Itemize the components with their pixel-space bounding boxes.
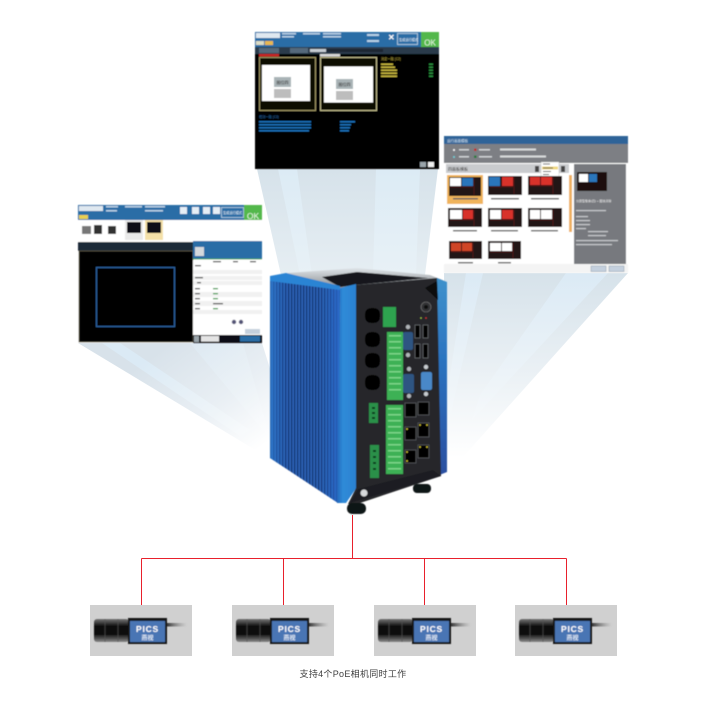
RJ45 ethernet ports — [405, 402, 429, 463]
tool icons — [82, 225, 116, 234]
light beam: top screen to device — [257, 169, 438, 275]
power connector and LEDs — [420, 302, 431, 319]
rubber feet — [347, 484, 431, 514]
footer bar — [193, 335, 262, 343]
front blue edge — [337, 284, 357, 503]
thumb screw — [360, 490, 368, 496]
blue result list: 检测一致 (C3) — [259, 114, 279, 119]
camera 1: 燕视 — [141, 634, 154, 642]
panel: right software screen: 运行画面模板 — [447, 138, 468, 143]
camera 3 — [374, 605, 476, 656]
camera view 2: 图位四 — [338, 81, 350, 87]
status: OK — [244, 205, 262, 221]
thumbnails — [125, 220, 163, 240]
device: industrial vision controller — [270, 268, 447, 514]
camera 3: PICS — [420, 624, 443, 634]
yellow result list — [381, 56, 433, 77]
panel: right software screen — [444, 136, 628, 273]
camera view 1: 图位四 — [276, 79, 288, 85]
top cover — [272, 268, 445, 288]
camera 2: 燕视 — [283, 634, 296, 642]
panel: left software screen — [78, 205, 262, 343]
header bar: 生成运行模式 — [399, 37, 419, 42]
camera 1 — [90, 605, 192, 656]
template captions — [453, 198, 559, 264]
template list heading — [446, 164, 569, 173]
header details: 生成运行模式 — [223, 210, 243, 215]
status: OK: OK — [424, 38, 436, 48]
camera image view — [79, 251, 193, 342]
yellow result list: 测定一致 (C2) — [381, 56, 401, 61]
template selected highlight — [447, 175, 483, 204]
camera 2: PICS — [278, 624, 301, 634]
camera 2 — [232, 605, 334, 656]
header details — [79, 206, 244, 219]
camera view 1 — [259, 54, 316, 110]
status: OK: OK — [247, 211, 259, 221]
preview side panel — [574, 164, 626, 264]
footer bar and buttons — [444, 264, 628, 273]
connection lines: red PoE wiring — [142, 515, 566, 605]
light beam: left screen to device — [78, 343, 272, 460]
camera 4: 燕视 — [566, 634, 579, 642]
camera 4 — [515, 605, 617, 656]
front black panel — [348, 278, 441, 504]
image toolbar — [78, 242, 194, 251]
caption: 支持4个PoE相机同时工作 — [300, 668, 406, 679]
toolbar — [255, 47, 439, 54]
result side panel — [193, 241, 262, 335]
right blue edge — [437, 278, 447, 476]
network-style round ports — [365, 308, 380, 390]
template thumbnails — [448, 176, 562, 259]
port indicators — [406, 424, 428, 462]
heat-sink fins — [270, 279, 340, 503]
corner buttons — [420, 162, 434, 167]
light beam: right screen to device — [444, 273, 628, 458]
blue result list — [259, 114, 355, 132]
serial ports — [403, 325, 432, 398]
green terminal blocks — [369, 307, 403, 478]
camera view 2 — [320, 54, 376, 110]
preview side panel: 分屏型像素(四) + 图块清除 — [576, 198, 611, 203]
header bar: ✕ — [388, 33, 395, 42]
panel: top software screen — [255, 32, 439, 169]
options row — [453, 148, 546, 158]
camera 4: PICS — [561, 624, 584, 634]
panel: right software screen: 四面板模板 — [448, 166, 468, 172]
dropdown menu — [535, 162, 565, 180]
camera 1: PICS — [136, 624, 159, 634]
header bar — [255, 32, 439, 47]
status: OK — [421, 32, 439, 48]
USB ports — [415, 325, 428, 358]
camera 3: 燕视 — [425, 634, 438, 642]
scrollbar — [569, 175, 572, 232]
